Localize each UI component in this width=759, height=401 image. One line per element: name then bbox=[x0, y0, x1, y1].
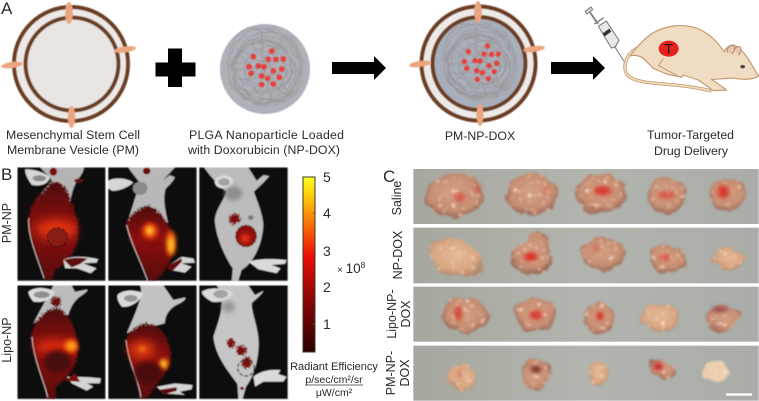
colorbar: 1 bbox=[323, 316, 331, 332]
mouse image: Lipo-NP right bbox=[199, 285, 288, 399]
colorbar: 2 bbox=[323, 279, 331, 295]
colorbar: 3 bbox=[323, 243, 331, 259]
scale bar bbox=[726, 393, 752, 396]
row label Lipo-NP: Lipo-NP bbox=[0, 317, 14, 363]
label: membrane vesicle: Mesenchymal Stem Cell bbox=[6, 128, 140, 142]
colorbar multiplier: 8 bbox=[361, 260, 366, 270]
colorbar unit label: Radiant Efficiency bbox=[290, 361, 378, 373]
label: PLGA nanoparticle: PLGA Nanoparticle Loaded bbox=[189, 128, 344, 142]
icon: membrane vesicle PM bbox=[1, 2, 136, 128]
label: drug delivery: Tumor-Targeted bbox=[647, 128, 734, 142]
icon: syringe bbox=[585, 7, 624, 61]
icon: PM-NP-DOX coated particle bbox=[409, 1, 545, 126]
mouse image: PM-NP left bbox=[17, 167, 105, 281]
photo row: Lipo-NP-DOX bbox=[413, 287, 759, 342]
colorbar bbox=[303, 169, 331, 352]
row label Saline: Saline bbox=[390, 181, 404, 215]
icon: mouse with tumor bbox=[625, 26, 759, 91]
row label PM-NP-DOX: PM-NP- bbox=[384, 351, 398, 395]
photo row: NP-DOX bbox=[413, 228, 759, 283]
image grid bbox=[17, 167, 288, 399]
colorbar unit label bbox=[290, 361, 378, 399]
panel C: tumor photographs bbox=[383, 167, 759, 401]
mouse image: PM-NP middle bbox=[108, 167, 197, 281]
mouse image: PM-NP right bbox=[199, 167, 288, 281]
tumor photo rows bbox=[413, 169, 759, 401]
mouse image: Lipo-NP middle bbox=[108, 285, 197, 399]
colorbar: 5 bbox=[323, 169, 331, 185]
icon: plus sign bbox=[156, 48, 196, 87]
row label NP-DOX: NP-DOX bbox=[391, 230, 405, 279]
icon: mouse with tumor: T bbox=[664, 41, 673, 57]
colorbar unit label: p/sec/cm²/sr bbox=[305, 374, 363, 386]
arrow: to drug delivery bbox=[551, 56, 605, 80]
label: PM-NP-DOX: PM-NP-DOX bbox=[445, 129, 515, 143]
label: membrane vesicle: Membrane Vesicle (PM) bbox=[7, 143, 139, 157]
photo row: Saline bbox=[413, 169, 759, 224]
arrow: to PM-NP-DOX bbox=[332, 56, 386, 80]
icon: PLGA nanoparticle loaded with doxorubicin bbox=[209, 12, 321, 124]
row label Lipo-NP-DOX: Lipo-NP- bbox=[385, 289, 399, 339]
row label Lipo-NP-DOX: DOX bbox=[399, 300, 413, 328]
panel letter C: C bbox=[383, 167, 395, 186]
label: PLGA nanoparticle: with Doxorubicin (NP-DOX) bbox=[187, 143, 340, 157]
row label PM-NP: PM-NP bbox=[0, 203, 14, 243]
label: drug delivery: Drug Delivery bbox=[654, 144, 729, 158]
panel letter B: B bbox=[1, 165, 12, 184]
colorbar unit label: μW/cm² bbox=[316, 387, 353, 399]
colorbar multiplier: × 10 bbox=[337, 261, 361, 276]
panel B: fluorescence images of mice bbox=[0, 165, 378, 399]
photo row: PM-NP-DOX bbox=[413, 346, 759, 401]
panel A: nanoparticle schematic bbox=[1, 0, 759, 158]
row label PM-NP-DOX: DOX bbox=[398, 359, 412, 387]
colorbar: 4 bbox=[323, 205, 331, 221]
mouse image: Lipo-NP left bbox=[17, 285, 105, 399]
